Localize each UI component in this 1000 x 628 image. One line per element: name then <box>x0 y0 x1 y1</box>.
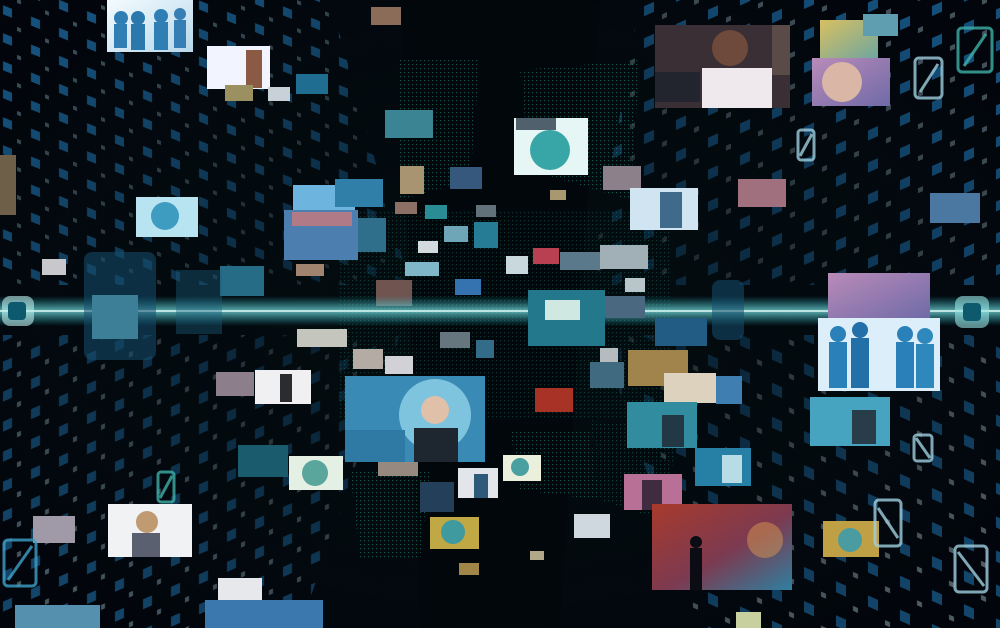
screens: centre row <box>92 273 940 404</box>
screens: upper middle <box>0 155 980 306</box>
dark central corridor <box>400 0 600 628</box>
screens: top row <box>107 0 898 190</box>
light band <box>0 252 1000 360</box>
screens: lower middle <box>238 376 890 575</box>
screen: figure with world map <box>652 504 792 590</box>
screens: bottom row <box>15 504 879 628</box>
glyph wall: left <box>0 0 410 628</box>
glyph wall: right <box>590 0 1000 628</box>
green dot fields <box>340 60 680 560</box>
